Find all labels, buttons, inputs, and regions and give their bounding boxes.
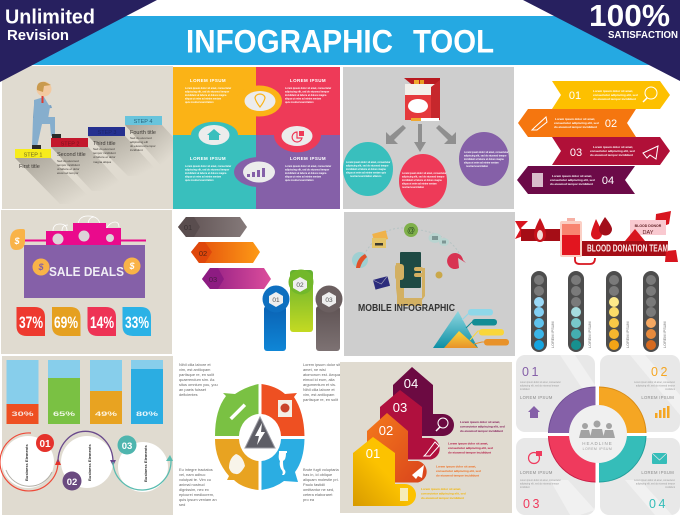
puzzle headings and body text: incididunt ut labore et dolore magna <box>285 94 327 97</box>
arc 01 <box>0 433 61 491</box>
badge 01: 01 <box>39 439 51 450</box>
panel: headline quadrant ring <box>516 355 680 515</box>
pillar 02: 02 <box>296 282 304 289</box>
card 03: incididunt <box>520 486 530 489</box>
step titles: do eiusmod tempor <box>130 144 156 148</box>
ribbon 04: do eiusmod tempor incididunt <box>550 182 593 186</box>
coins <box>10 229 140 276</box>
block 01 <box>353 437 416 506</box>
panel: staircase steps <box>2 66 173 209</box>
panel: stacked house arrows <box>340 362 512 513</box>
puzzle headings and body text: quis nostrud exercitation <box>285 179 314 182</box>
left bottom text: vel, nam adhuc <box>179 472 205 477</box>
puzzle headings and body text: incididunt ut labore et dolore magna <box>185 94 227 97</box>
stat tile 69%: 69% <box>54 313 78 332</box>
puzzle headings and body text: LOREM IPSUM <box>190 78 226 83</box>
purple circle: adipiscing elit, sed do eiusmod tempor <box>464 154 507 158</box>
card 01: adipiscing elit, sed do eiusmod tempor <box>520 384 559 388</box>
card 02: adipiscing elit, sed do eiusmod tempor <box>636 384 675 388</box>
block 04 text: do eiusmod tempor incididunt <box>460 429 503 433</box>
card 02: LOREM IPSUM <box>641 395 674 400</box>
ribbon 04: consectetur adipiscing elit, sed <box>550 178 595 182</box>
icon: businessman climbing <box>32 82 61 149</box>
right bottom text: Brute fugit voluptaria <box>303 467 340 472</box>
pillar 02 <box>288 270 314 332</box>
level column 1 <box>531 271 555 352</box>
ring quadrant purple <box>548 387 596 433</box>
title: TOOL <box>413 24 494 60</box>
hex label 02 <box>191 242 260 263</box>
right top text: Nihil cilia labore et <box>303 387 335 392</box>
arrows from pack to circles <box>386 124 456 152</box>
teal circle: Lorem ipsum dolor sit amet, consectetur <box>346 161 391 164</box>
block 03 <box>380 390 440 460</box>
left bottom text: quis ipsum veniam an <box>179 497 217 502</box>
badge 03: 03 <box>122 441 132 452</box>
bar 65% <box>48 360 80 424</box>
step 1 <box>15 149 51 158</box>
right bottom text <box>303 467 340 502</box>
step 3: STEP 3 <box>98 130 116 136</box>
right top text: vim, est antilopam <box>303 392 334 397</box>
icon: email at sign <box>404 223 418 237</box>
card 03 <box>516 438 595 515</box>
right top text: argumentum et vis. <box>303 382 336 387</box>
puzzle headings and body text: LOREM IPSUM <box>290 156 326 161</box>
step titles: tempor incididunt <box>57 163 80 167</box>
donor drops and day label: BLOOD DONOR <box>635 224 662 228</box>
step titles: eiusmod tempor <box>57 171 79 175</box>
puzzle headings and body text: LOREM IPSUM <box>290 78 326 83</box>
panel: sale deals <box>1 210 172 354</box>
panel: four-colour puzzle <box>173 67 340 209</box>
stat tile 69% <box>52 307 80 336</box>
right top text: amet, ne wisi <box>303 367 326 372</box>
vertical labels: Business Elements <box>24 444 29 481</box>
left top text: quaerendum sim. As <box>179 377 215 382</box>
puzzle headings and body text: aliqua ut enim ad minim veniam <box>185 98 221 100</box>
coins: $ <box>128 261 135 271</box>
ribbon 01: 01 <box>569 90 581 102</box>
red circle: aliqua ut enim ad minim veniam <box>402 182 437 186</box>
block 02: 02 <box>379 423 393 438</box>
ring centre headline: HEADLINE <box>582 441 613 446</box>
step titles: Sed do eiusmod <box>93 147 115 151</box>
ribbon 03: do eiusmod tempor incididunt <box>590 153 633 157</box>
stat tile 33% <box>122 307 151 336</box>
step titles: Third title <box>93 141 116 147</box>
red circle: incididunt ut labore et dolore magna <box>402 179 442 182</box>
teal circle: aliqua ut enim ad minim veniam quis <box>346 172 387 174</box>
left bottom text: sed <box>179 502 185 507</box>
left bottom text <box>179 467 217 507</box>
ribbon 02: Lorem ipsum dolor sit amet, <box>555 117 595 121</box>
bar 80%: 80% <box>136 411 158 418</box>
sale deals text: SALE DEALS <box>49 264 124 279</box>
ribbon 03: consectetur adipiscing elit, sed <box>590 149 635 153</box>
block 02 text <box>436 464 481 478</box>
ring quadrant red <box>548 436 596 482</box>
level column 2 <box>568 271 592 352</box>
block 04 text: consectetur adipiscing elit, sed <box>460 424 505 428</box>
puzzle headings and body text: Lorem ipsum dolor sit amet, consectetur <box>285 165 331 168</box>
ribbon 04 <box>517 166 635 194</box>
right bottom text: cetera elaboraret <box>303 492 333 497</box>
purple circle: incididunt ut labore et dolore magna <box>464 158 504 161</box>
purple circle: nostrud exercitation <box>466 165 489 168</box>
block 03 text <box>448 442 493 454</box>
ribbon 02: 02 <box>605 118 617 130</box>
hex label 01: 01 <box>184 223 192 232</box>
coins: $ <box>37 262 44 272</box>
left top text: Nihil cilia labore et <box>179 362 211 367</box>
block 02 <box>367 413 427 482</box>
block 02 text: consectetur adipiscing elit, sed <box>436 469 481 473</box>
right bottom text: pro ea <box>303 497 315 502</box>
card 04 <box>600 438 680 515</box>
card 01: 01 <box>522 365 541 379</box>
panel: bars and business elements <box>0 356 173 515</box>
teal circle: nostrud exercitation ullamco <box>350 175 382 178</box>
card 02: incididunt <box>665 388 675 391</box>
bar 80% <box>131 360 163 424</box>
right bottom text: aliquam molestie pri. <box>303 477 339 482</box>
mobile infographic caption: MOBILE INFOGRAPHIC <box>358 303 455 314</box>
level column 3: LOREM IPSUM <box>626 321 630 348</box>
stat tile 14% <box>88 307 116 336</box>
ribbon 03: Lorem ipsum dolor sit amet, <box>593 145 633 149</box>
icon: pie <box>447 253 466 269</box>
block 03 text: Lorem ipsum dolor sit amet, <box>448 442 488 446</box>
puzzle headings and body text: aliqua ut enim ad minim veniam <box>285 98 321 100</box>
card 03: 03 <box>523 497 542 511</box>
left top text <box>179 362 218 397</box>
block 01 text: do eiusmod tempor incididunt <box>421 496 464 500</box>
card 02 <box>600 355 680 432</box>
left top text: deficientes <box>179 392 198 397</box>
level column 2: LOREM IPSUM <box>588 321 592 348</box>
pillar 01 <box>262 286 290 351</box>
panel: hexagon labels and pillars <box>178 217 342 351</box>
card 04: Lorem ipsum dolor sit amet, consectetur <box>634 479 675 482</box>
hand holding phone <box>395 252 425 306</box>
panel: mobile infographic <box>344 212 515 356</box>
puzzle headings and body text: adipiscing elit, sed do eiusmod tempor <box>285 90 329 94</box>
left bottom text: dignissim, nec ex <box>179 487 209 492</box>
right bottom text: has in, id oblique <box>303 472 332 477</box>
pillar 01: 01 <box>272 297 280 304</box>
red circle: adipiscing elit, sed do eiusmod tempor <box>402 176 445 178</box>
bar 65%: 65% <box>53 411 75 418</box>
puzzle headings and body text: quis nostrud exercitation <box>185 101 214 104</box>
corner ribbon: unlimited revision: Unlimited <box>5 6 95 28</box>
stat tile 37%: 37% <box>19 313 43 332</box>
badge 03 <box>118 436 136 454</box>
icon: email at sign: @ <box>407 226 415 235</box>
card 04: 04 <box>649 497 668 511</box>
right top text: Lorem ipsum dolor sit <box>303 362 341 367</box>
ring quadrant teal <box>599 436 646 482</box>
vertical labels: Business Elements <box>143 445 148 482</box>
panel: blood donation <box>515 211 678 352</box>
block 01 text <box>421 487 466 500</box>
hex label 01 <box>178 217 247 237</box>
ribbon 02: do eiusmod tempor incididunt <box>554 125 597 129</box>
step 3 <box>88 127 125 136</box>
orange quadrant with sign icon <box>262 384 304 436</box>
right top text: eimod id eum, alia <box>303 377 335 382</box>
step 4: STEP 4 <box>134 119 152 125</box>
puzzle headings and body text: Lorem ipsum dolor sit amet, consectetur <box>285 87 331 90</box>
left bottom text: epicurei mediocrem, <box>179 492 214 497</box>
puzzle headings and body text: Lorem ipsum dolor sit amet, consectetur <box>185 165 231 168</box>
puzzle headings and body text: incididunt ut labore et dolore magna <box>285 172 327 175</box>
left top text: vim, est antilopam <box>179 367 210 372</box>
mountain chart with labels <box>433 309 509 348</box>
pillar 03 <box>316 286 342 351</box>
step 2: STEP 2 <box>61 142 79 148</box>
block 03: 03 <box>393 400 407 415</box>
ribbon 01: do eiusmod tempor incididunt <box>593 97 636 101</box>
right top text: atomorum est. Aequat <box>303 372 342 377</box>
panel: zigzag ribbon list <box>517 81 670 194</box>
block 04 text <box>460 420 505 433</box>
ribbon 03 <box>552 137 670 165</box>
bar 30% <box>6 360 38 424</box>
step titles: ut labore et dolor <box>93 155 116 159</box>
step 1: STEP 1 <box>24 152 42 158</box>
teal circle <box>343 142 393 196</box>
stat tile 33%: 33% <box>125 313 149 332</box>
ribbon 01: consectetur adipiscing elit, sed <box>593 93 638 97</box>
block 03 text: consectetur adipiscing elit, sed <box>448 446 493 450</box>
hex label 02: 02 <box>199 249 207 258</box>
red circle <box>399 154 447 208</box>
step titles: Sed do eiusmod <box>57 159 79 163</box>
arc 03 <box>113 455 173 490</box>
left top text: an paeis fuisset <box>179 387 207 392</box>
purple circle: Lorem ipsum dolor sit amet, consectetur <box>464 151 509 154</box>
ribbon 01 <box>552 81 670 109</box>
puzzle headings and body text: aliqua ut enim ad minim veniam <box>185 176 221 178</box>
left bottom text: volutpat te. Vim cu <box>179 477 211 482</box>
yellow puzzle tab with pin icon <box>236 86 282 116</box>
panel: electricity safety ring <box>179 362 342 507</box>
puzzle headings and body text <box>185 78 331 182</box>
puzzle headings and body text: quis nostrud exercitation <box>185 179 214 182</box>
badge 01 <box>36 434 54 452</box>
shopping bags <box>25 216 146 248</box>
pillar 03: 03 <box>325 297 333 304</box>
teal circle: adipiscing elit, sed do eiusmod tempor <box>346 164 389 168</box>
card 02: Lorem ipsum dolor sit amet, consectetur <box>634 381 675 384</box>
right top text: partisque re, en solit <box>303 397 339 402</box>
block 04 <box>393 367 454 436</box>
icon: cigarette pack <box>404 78 440 121</box>
puzzle headings and body text: quis nostrud exercitation <box>285 101 314 104</box>
blood bag <box>560 218 595 264</box>
block 04 text: Lorem ipsum dolor sit amet, <box>460 420 500 424</box>
icon: photos <box>372 230 388 248</box>
icon: chat bubbles <box>428 233 449 246</box>
block 02 text: do eiusmod tempor incididunt <box>436 474 479 478</box>
card 04: incididunt <box>665 486 675 489</box>
puzzle headings and body text: Lorem ipsum dolor sit amet, consectetur <box>185 87 231 90</box>
bar 30%: 30% <box>12 411 34 418</box>
step 4 <box>125 116 162 125</box>
ribbon 02: consectetur adipiscing elit, sed <box>554 121 599 125</box>
step titles: tempor incididunt <box>93 151 116 155</box>
title: INFOGRAPHIC <box>186 24 393 60</box>
step titles: First title <box>19 164 40 170</box>
puzzle headings and body text: adipiscing elit, sed do eiusmod tempor <box>285 168 329 172</box>
banner: blue title band <box>0 16 650 65</box>
blue quadrant with plug icon <box>262 439 304 490</box>
corner ribbon: 100% satisfaction <box>523 0 680 81</box>
card 03: Lorem ipsum dolor sit amet, consectetur <box>520 479 561 482</box>
card 01: incididunt <box>520 388 530 391</box>
ribbon 03: 03 <box>570 147 582 159</box>
vertical labels: Business Elements <box>87 444 92 481</box>
left top text: situs omnium you, you <box>179 382 218 387</box>
stat tile 14%: 14% <box>90 313 114 332</box>
vertical labels <box>24 444 148 482</box>
white circles <box>2 436 168 492</box>
card 01: LOREM IPSUM <box>520 395 553 400</box>
block 03 text: do eiusmod tempor incididunt <box>448 450 491 454</box>
hex label 03 <box>202 268 271 289</box>
icon: envelope <box>373 276 390 290</box>
red circle: nostrud exercitation <box>402 186 425 189</box>
left bottom text: Eu integre tractatos <box>179 467 213 472</box>
step titles <box>19 130 156 175</box>
puzzle headings and body text: adipiscing elit, sed do eiusmod tempor <box>185 90 229 94</box>
puzzle headings and body text: incididunt ut labore et dolore magna <box>185 172 227 175</box>
right bottom text: Paulo fastidii <box>303 482 325 487</box>
red circle: Lorem ipsum dolor sit amet, consectetur <box>402 172 447 175</box>
corner ribbon: unlimited revision: Revision <box>7 27 69 44</box>
stat tile 37% <box>16 307 45 336</box>
card 04: adipiscing elit, sed do eiusmod tempor <box>636 482 675 486</box>
step titles: magna aliqua <box>93 160 111 164</box>
level column 4 <box>643 271 667 352</box>
card 01: Lorem ipsum dolor sit amet, consectetur <box>520 381 561 384</box>
card 04: LOREM IPSUM <box>641 470 674 475</box>
ribbon 01: Lorem ipsum dolor sit amet, <box>593 89 633 93</box>
left bottom text: animal nostrud <box>179 482 205 487</box>
ribbon 04: Lorem ipsum dolor sit amet, <box>552 174 592 178</box>
right top text <box>303 362 342 402</box>
ribbon 04: 04 <box>602 175 614 187</box>
right bottom text: omittantur ne sed, <box>303 487 334 492</box>
green quadrant with wire icon <box>215 384 258 436</box>
puzzle headings and body text: LOREM IPSUM <box>190 156 226 161</box>
purple circle <box>459 132 509 186</box>
step titles: Second title <box>57 152 86 158</box>
ring quadrant amber <box>599 387 646 433</box>
left ribbon with drop <box>515 218 561 242</box>
bar 49% <box>90 360 122 424</box>
step 2 <box>51 138 88 148</box>
card 01 <box>516 355 595 432</box>
step titles: Sed do eiusmod <box>130 136 152 140</box>
badge 02 <box>62 472 82 490</box>
donor drops and day label <box>591 211 671 240</box>
level column 4: LOREM IPSUM <box>663 321 667 348</box>
ribbon 02 <box>518 109 636 137</box>
hex label 03: 03 <box>209 275 217 284</box>
donor drops and day label: DAY <box>643 230 654 236</box>
teal puzzle tab with house icon <box>191 122 238 145</box>
blood donation team banner <box>582 229 678 262</box>
block 04: 04 <box>404 376 418 391</box>
coins: $ <box>13 236 20 246</box>
badge 02: 02 <box>67 477 77 488</box>
panel: cigarette pack <box>343 67 514 209</box>
card 02: 02 <box>651 365 670 379</box>
level column 3 <box>606 271 630 352</box>
red puzzle tab with pie icon <box>274 126 321 152</box>
teal circle: incididunt ut labore et dolore magna <box>346 168 386 171</box>
purple circle: aliqua ut enim ad minim veniam <box>464 162 499 164</box>
card 03: adipiscing elit, sed do eiusmod tempor <box>520 482 559 486</box>
yellow quadrant with gloves icon <box>215 439 258 490</box>
corner ribbon: unlimited revision <box>0 0 157 82</box>
ring centre headline <box>569 405 627 463</box>
step titles: ut labore et dolor <box>57 167 80 171</box>
icon: telephone <box>352 252 368 268</box>
bar 49%: 49% <box>95 411 117 418</box>
block 01 text: Lorem ipsum dolor sit amet, <box>421 487 461 491</box>
purple puzzle tab with bars icon <box>234 157 284 187</box>
step titles: incididunt <box>130 148 143 152</box>
block 02 text: Lorem ipsum dolor sit amet, <box>436 464 476 468</box>
left top text: partisque re, en solit <box>179 372 215 377</box>
step titles: Fourth title <box>130 130 156 136</box>
block 01: 01 <box>366 446 380 461</box>
puzzle headings and body text: adipiscing elit, sed do eiusmod tempor <box>185 168 229 172</box>
puzzle headings and body text: aliqua ut enim ad minim veniam <box>285 176 321 178</box>
arc 02 <box>58 431 116 466</box>
step titles: adipiscing elit <box>130 140 148 144</box>
centre warning triangle <box>245 417 275 448</box>
card 03: LOREM IPSUM <box>520 470 553 475</box>
purple sale banner <box>24 245 145 298</box>
ring centre headline: LOREM IPSUM <box>583 447 612 451</box>
level column 1: LOREM IPSUM <box>551 321 555 348</box>
icon: coin <box>436 272 442 278</box>
block 01 text: consectetur adipiscing elit, sed <box>421 492 466 496</box>
